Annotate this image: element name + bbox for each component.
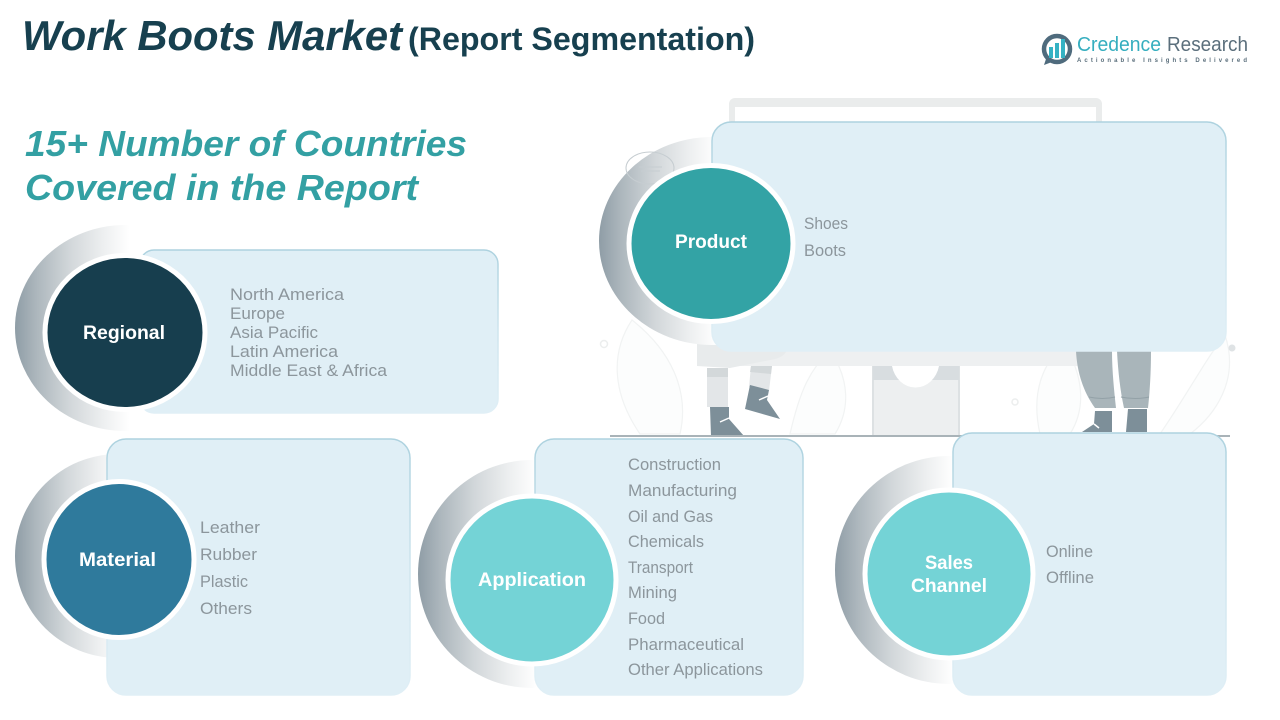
list: sales channel: Offline bbox=[1046, 569, 1094, 587]
card: application bbox=[535, 439, 803, 695]
monitor frame bbox=[729, 98, 1102, 158]
list: application: Food bbox=[628, 610, 665, 628]
label: material: Material bbox=[79, 550, 156, 571]
list: material: Plastic bbox=[200, 573, 248, 591]
circle: material bbox=[44, 482, 194, 638]
panel: application bbox=[418, 439, 803, 695]
label: application: Application bbox=[478, 570, 586, 591]
label: sales channel bbox=[911, 553, 987, 597]
list: product: Shoes bbox=[804, 215, 848, 233]
list: application: Transport bbox=[628, 559, 693, 577]
list: material: Leather bbox=[200, 519, 261, 537]
title bbox=[22, 12, 755, 59]
list: application: Other Applications bbox=[628, 661, 763, 679]
list: application: Chemicals bbox=[628, 533, 704, 551]
crescent: regional bbox=[15, 225, 235, 431]
list: application: Oil and Gas bbox=[628, 508, 713, 526]
list: regional: Latin America bbox=[230, 343, 339, 361]
panel: regional bbox=[15, 225, 498, 431]
crescent: application bbox=[418, 460, 646, 688]
list: sales channel: Online bbox=[1046, 543, 1093, 561]
panel: sales channel bbox=[835, 433, 1226, 695]
subheading: countries covered: 15+ Number of Countries bbox=[25, 123, 467, 164]
circle: product bbox=[629, 166, 793, 322]
label: product: Product bbox=[675, 232, 748, 253]
panel: material bbox=[15, 439, 410, 695]
circle: application bbox=[448, 496, 616, 664]
title: (Report Segmentation) bbox=[408, 21, 755, 57]
list: product: Boots bbox=[804, 242, 846, 260]
circle: sales channel bbox=[865, 490, 1033, 658]
title: Work Boots Market bbox=[22, 12, 404, 59]
list: sales channel bbox=[1046, 543, 1094, 587]
label: regional: Regional bbox=[83, 323, 165, 344]
icon: crescent button bbox=[626, 152, 674, 184]
card: sales channel bbox=[953, 433, 1226, 695]
monitor stand bbox=[872, 366, 960, 436]
list: material: Rubber bbox=[200, 546, 258, 564]
list: regional: North America bbox=[230, 286, 345, 304]
list: application: Manufacturing bbox=[628, 482, 737, 500]
subheading: countries covered bbox=[25, 123, 467, 208]
card: material bbox=[107, 439, 410, 695]
ground line bbox=[610, 435, 1230, 437]
label: sales channel: Channel bbox=[911, 576, 987, 597]
list: application: Pharmaceutical bbox=[628, 636, 744, 654]
list: regional bbox=[230, 286, 388, 380]
logo: Credence Research: Actionable Insights Delivered bbox=[1077, 58, 1247, 64]
list: regional: Europe bbox=[230, 305, 285, 323]
logo: Credence Research: Research bbox=[1167, 34, 1248, 56]
background illustration: monitor and legs bbox=[600, 98, 1236, 436]
label: sales channel: Sales bbox=[925, 553, 973, 574]
subheading: countries covered: Covered in the Report bbox=[25, 167, 420, 208]
crescent: sales channel bbox=[835, 456, 1063, 684]
right person legs bbox=[1076, 351, 1116, 408]
list: material: Others bbox=[200, 600, 252, 618]
logo: Credence Research: Credence bbox=[1077, 34, 1161, 56]
left person legs bbox=[697, 338, 787, 368]
crescent: material bbox=[15, 454, 221, 658]
card: product bbox=[712, 122, 1226, 351]
logo: Credence Research bbox=[1044, 34, 1248, 65]
list: regional: Asia Pacific bbox=[230, 324, 318, 342]
circle: regional bbox=[45, 256, 205, 410]
crescent: product bbox=[599, 137, 825, 345]
list: application bbox=[628, 456, 763, 679]
list: application: Construction bbox=[628, 456, 721, 474]
card: regional bbox=[140, 250, 498, 413]
list: product bbox=[804, 215, 848, 260]
list: application: Mining bbox=[628, 584, 677, 602]
list: regional: Middle East & Africa bbox=[230, 362, 388, 380]
list: material bbox=[200, 519, 261, 618]
panel: product bbox=[599, 122, 1226, 351]
